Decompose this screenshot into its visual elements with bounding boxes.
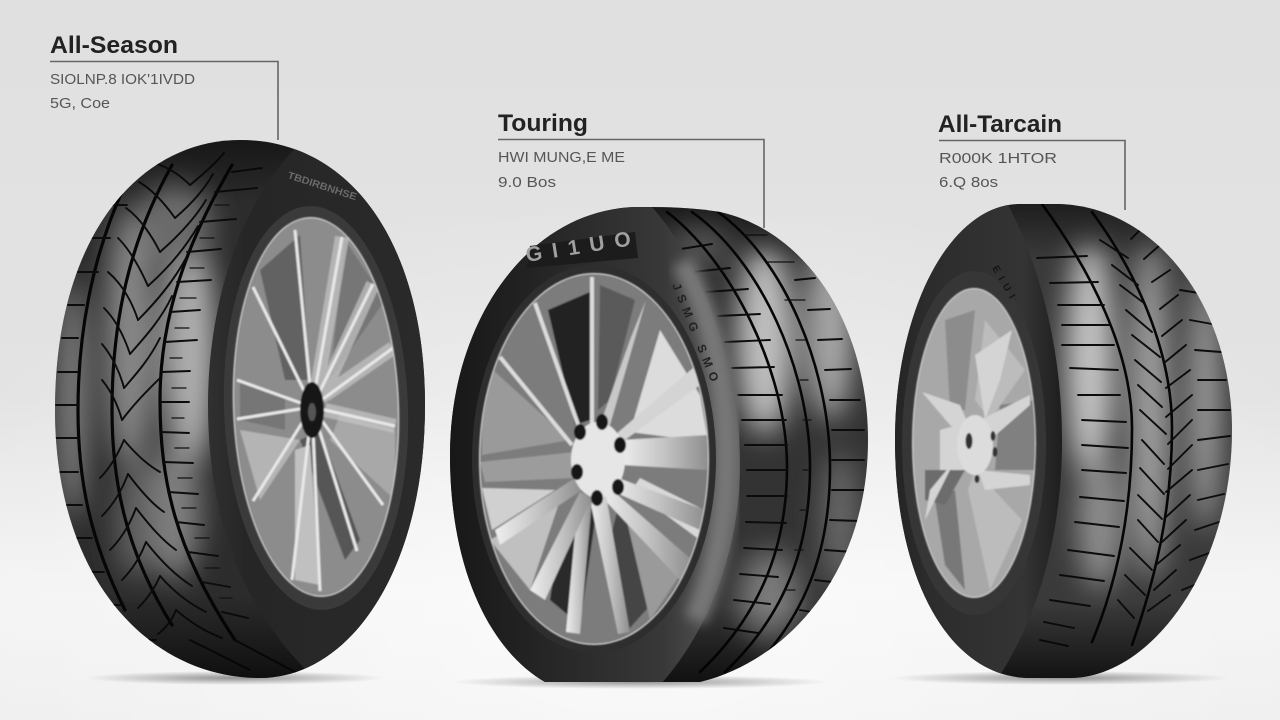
- spec text: all-terrain: [939, 150, 1057, 191]
- hub and lug nuts: [957, 415, 993, 475]
- sidewall: [895, 205, 1062, 674]
- tire: all-terrain: [895, 204, 1232, 678]
- sidewall inner band: [472, 265, 716, 653]
- rib and shoulder lines: [161, 168, 262, 618]
- thick lower spokes: [495, 435, 708, 634]
- heading: touring: Touring: [498, 110, 588, 137]
- spec text: all-season: SIOLNP.8 IOK'1IVDD: [50, 71, 195, 88]
- hub: [300, 382, 324, 438]
- wheel rim: [226, 214, 406, 600]
- leader line: all-season: [50, 62, 278, 140]
- leader line: all-terrain: [939, 140, 1125, 210]
- sidewall: [208, 149, 425, 668]
- sidewall lettering: TBDIRBNHSE: [286, 170, 358, 203]
- spec text: all-season: [50, 71, 195, 112]
- ground shadows: [85, 671, 1230, 689]
- panel: touring label: [498, 110, 764, 228]
- tread body: [895, 204, 1232, 678]
- spec text: all-terrain: R000K 1HTOR: [939, 150, 1057, 167]
- hub and lug nuts: [571, 422, 625, 498]
- tire: touring: [450, 207, 868, 682]
- panel: all-terrain label: [938, 111, 1125, 210]
- tread body: [55, 140, 425, 678]
- spec text: all-season: 5G, Coe: [50, 95, 110, 112]
- tread pattern: [55, 140, 425, 678]
- main grooves: [78, 165, 235, 640]
- spec text: touring: [498, 149, 625, 191]
- panel: all-season label: [50, 32, 278, 140]
- sidewall inner band: [902, 271, 1046, 615]
- sidewall: [450, 207, 740, 682]
- spec text: all-terrain: 6.Q 8os: [939, 174, 998, 191]
- sidewall lettering: EIUI: [989, 264, 1017, 301]
- tread pattern: [450, 207, 866, 682]
- sidewall inner band: [217, 203, 415, 613]
- heading: all-season: All-Season: [50, 32, 178, 59]
- tread body: [450, 207, 868, 682]
- feather branches: [122, 153, 224, 420]
- tread pattern: [895, 204, 1232, 678]
- wheel rim: [478, 272, 710, 647]
- thin upper spokes: [500, 277, 592, 445]
- tire: all-season: [55, 140, 425, 678]
- wheel rim: [910, 285, 1040, 600]
- sidewall highlight: [682, 262, 726, 620]
- heading: all-terrain: All-Tarcain: [938, 111, 1062, 138]
- sidewall lettering: JSMG SMO: [669, 281, 722, 383]
- leader line: touring: [498, 140, 764, 228]
- spec text: touring: 9.0 Bos: [498, 174, 556, 191]
- sidewall lettering: GI1UO: [524, 228, 632, 267]
- sidewall lettering: [524, 228, 722, 383]
- spec text: touring: HWI MUNG,E ME: [498, 149, 625, 166]
